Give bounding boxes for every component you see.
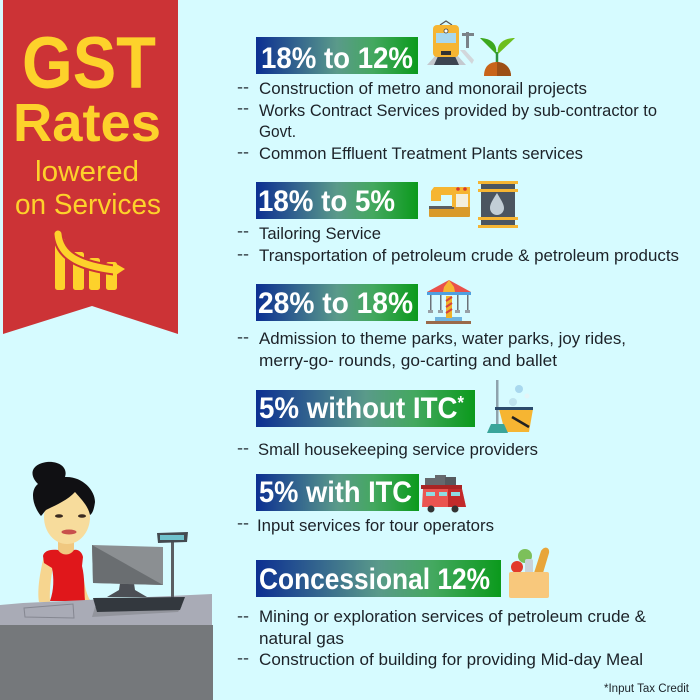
illustration: cashier at counter	[0, 462, 213, 700]
counter top	[0, 594, 212, 625]
panel: 5% without ITC	[237, 380, 538, 459]
panel: 5% with ITC	[237, 474, 494, 535]
icon: metro train	[427, 21, 474, 65]
woman's smile	[62, 530, 76, 534]
rate label: Concessional 12%	[259, 563, 490, 596]
keyboard	[24, 604, 74, 618]
price display	[157, 532, 188, 598]
rate label: *	[458, 393, 464, 413]
bullet list: --	[237, 246, 249, 263]
bullet list: --	[237, 608, 249, 625]
bullet list: Small housekeeping service providers	[258, 440, 538, 459]
monitor	[92, 545, 163, 585]
bullet list: Mining or exploration services of petroleum crude &	[259, 607, 647, 626]
panel: 28% to 18%	[237, 280, 626, 370]
icon: tour bus	[421, 475, 466, 512]
rate bar	[256, 284, 418, 321]
subtitle: on Services: on Services	[15, 189, 161, 221]
footnote: *Input Tax Credit	[604, 683, 690, 695]
rate label: 18% to 5%	[258, 185, 395, 218]
rate bar	[256, 474, 419, 511]
bullet list: --	[237, 515, 249, 532]
bullet list: Works Contract Services provided by sub-contractor to	[259, 101, 657, 120]
panel: 18% to 12%	[237, 21, 657, 163]
bullet list: Govt.	[259, 122, 296, 141]
bullet list	[237, 223, 679, 265]
bullet list: --	[237, 100, 249, 117]
bullet list	[237, 607, 647, 669]
panel: Concessional 12%	[237, 548, 647, 669]
rate label: 18% to 12%	[261, 42, 413, 75]
bullet list: --	[237, 650, 249, 667]
panel: 18% to 5%	[237, 181, 679, 265]
subtitle: lowered: lowered	[35, 156, 139, 188]
bullet list: --	[237, 440, 249, 457]
bullet list: --	[237, 79, 249, 96]
rate bar	[256, 37, 418, 74]
icon: sewing machine	[429, 187, 470, 217]
bullet list: natural gas	[259, 629, 344, 648]
register shadow	[92, 606, 182, 617]
bullet list: Tailoring Service	[259, 224, 381, 243]
bullet list: Construction of metro and monorail projects	[259, 79, 587, 98]
bullet list: Construction of building for providing Mid-day Meal	[259, 650, 643, 669]
bullet list: --	[237, 223, 249, 240]
rate bar	[256, 560, 501, 597]
woman's eyes	[55, 514, 86, 518]
icon: grocery bag	[509, 548, 549, 598]
bullet list: Input services for tour operators	[257, 516, 494, 535]
title: Rates: Rates	[13, 93, 161, 153]
woman's neck	[58, 535, 74, 556]
bullet list: --	[237, 329, 249, 346]
bullet list: --	[237, 144, 249, 161]
rate label: 5% with ITC	[259, 476, 412, 509]
rate bar	[256, 182, 418, 219]
icon: falling bar chart with arrow	[55, 234, 125, 290]
bullet list	[237, 329, 626, 370]
icon: cleaning bucket	[487, 380, 533, 433]
bullet list: Common Effluent Treatment Plants services	[259, 144, 583, 163]
woman's face	[44, 490, 90, 544]
bullet list: merry-go- rounds, go-carting and ballet	[259, 351, 557, 370]
bullet list	[237, 79, 657, 163]
rate label: 28% to 18%	[258, 287, 413, 320]
rate label: 5% without ITC	[259, 392, 474, 425]
rate bar	[256, 390, 475, 427]
woman's arms	[38, 556, 90, 604]
monitor stand	[107, 570, 147, 597]
icon: oil barrel	[478, 181, 518, 228]
title: GST: GST	[22, 23, 156, 104]
register base	[93, 597, 185, 612]
icon: carousel	[426, 280, 471, 324]
counter front	[0, 625, 213, 700]
woman's hair	[32, 462, 95, 516]
panel: title ribbon	[3, 0, 178, 334]
bullet list: Admission to theme parks, water parks, joy rides,	[259, 329, 626, 348]
icon: plant sprout	[480, 38, 515, 76]
bullet list: Transportation of petroleum crude & petroleum products	[259, 246, 679, 265]
woman's red top	[43, 550, 85, 601]
